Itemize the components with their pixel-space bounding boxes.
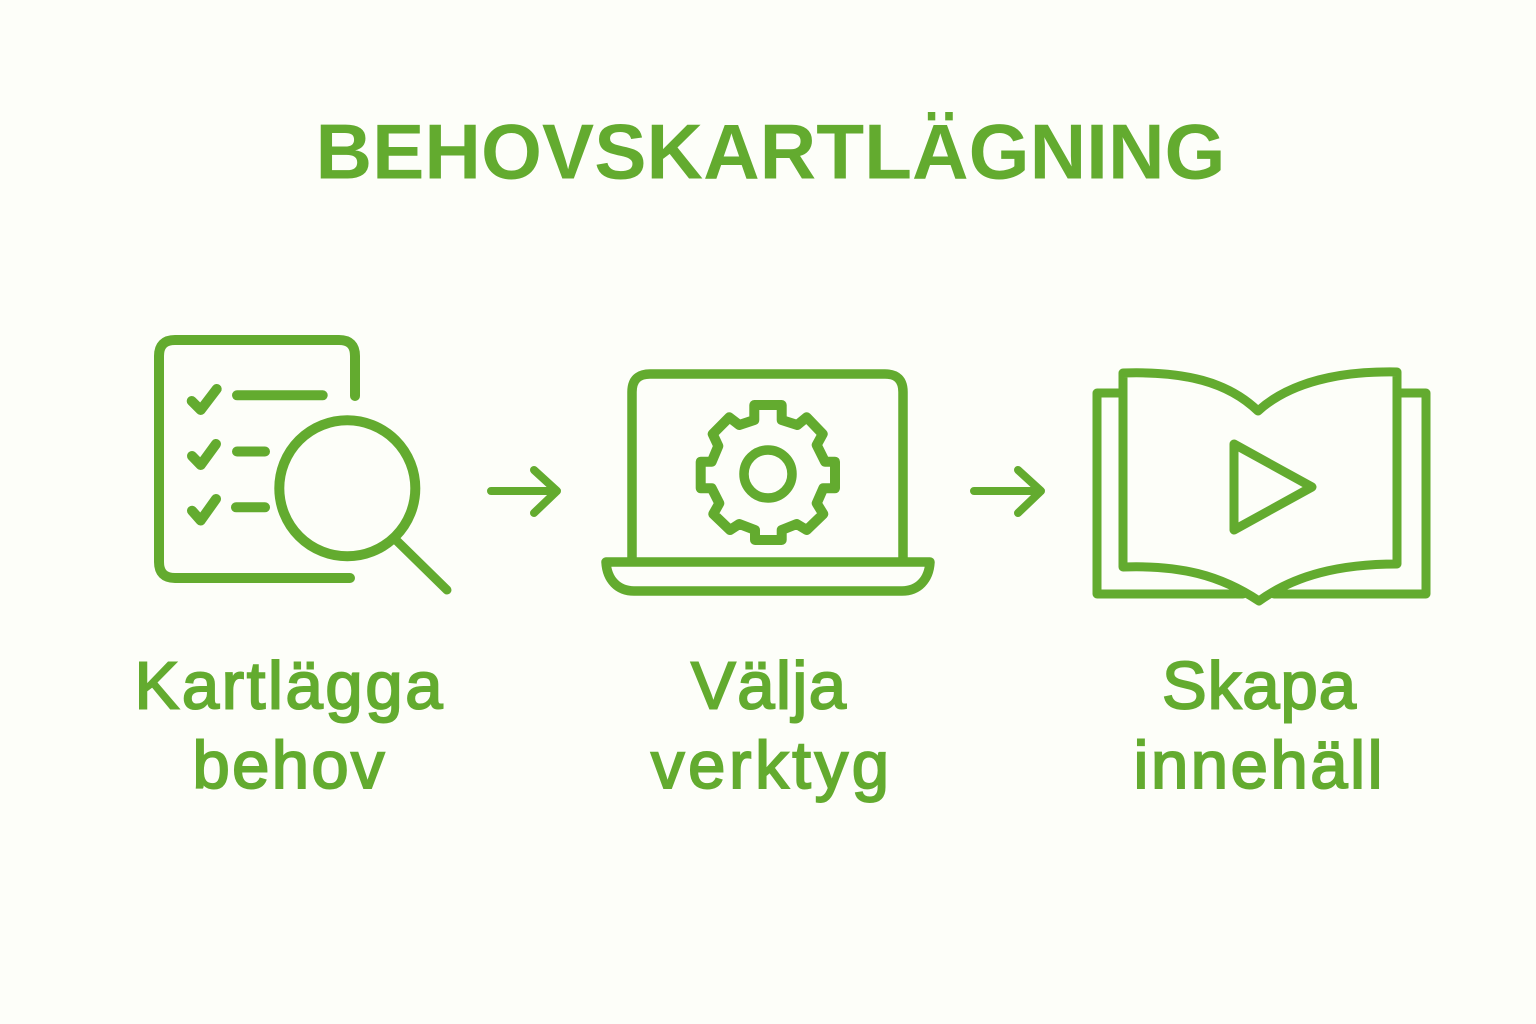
arrow 1 (491, 470, 557, 513)
label: Välja verktyg: verktyg (651, 728, 889, 803)
label: Välja verktyg (651, 648, 889, 803)
check 2 (192, 444, 216, 465)
arrow 2 (974, 470, 1041, 513)
text line 2 (237, 446, 265, 456)
laptop base (606, 562, 930, 591)
check 3 (192, 499, 216, 520)
gear hub (744, 450, 792, 498)
label: Skapa innehäll (1134, 648, 1382, 803)
step 2 icon: laptop with gear (606, 374, 930, 591)
book pages (1123, 372, 1397, 601)
gear (701, 405, 835, 540)
step 1 icon: checklist with magnifier (159, 340, 447, 590)
document outline (159, 340, 355, 578)
label: Skapa innehäll: Skapa (1162, 648, 1357, 724)
label: Kartlägga behov: Kartlägga (134, 648, 443, 724)
title: BEHOVSKARTLÄGNING (316, 108, 1226, 196)
step 3 icon: open book with play symbol (1097, 372, 1426, 601)
magnifier handle (396, 540, 447, 590)
magnifier lens (279, 420, 415, 556)
label: Kartlägga behov (134, 648, 443, 803)
book back cover (1097, 393, 1426, 594)
text line 3 (236, 502, 265, 512)
label: Skapa innehäll: innehäll (1134, 728, 1382, 803)
label: Välja verktyg: Välja (691, 648, 847, 724)
check 1 (192, 389, 217, 410)
label: Kartlägga behov: behov (192, 728, 385, 803)
text line 1 (237, 390, 323, 400)
laptop screen (632, 374, 903, 560)
play triangle (1234, 444, 1312, 530)
